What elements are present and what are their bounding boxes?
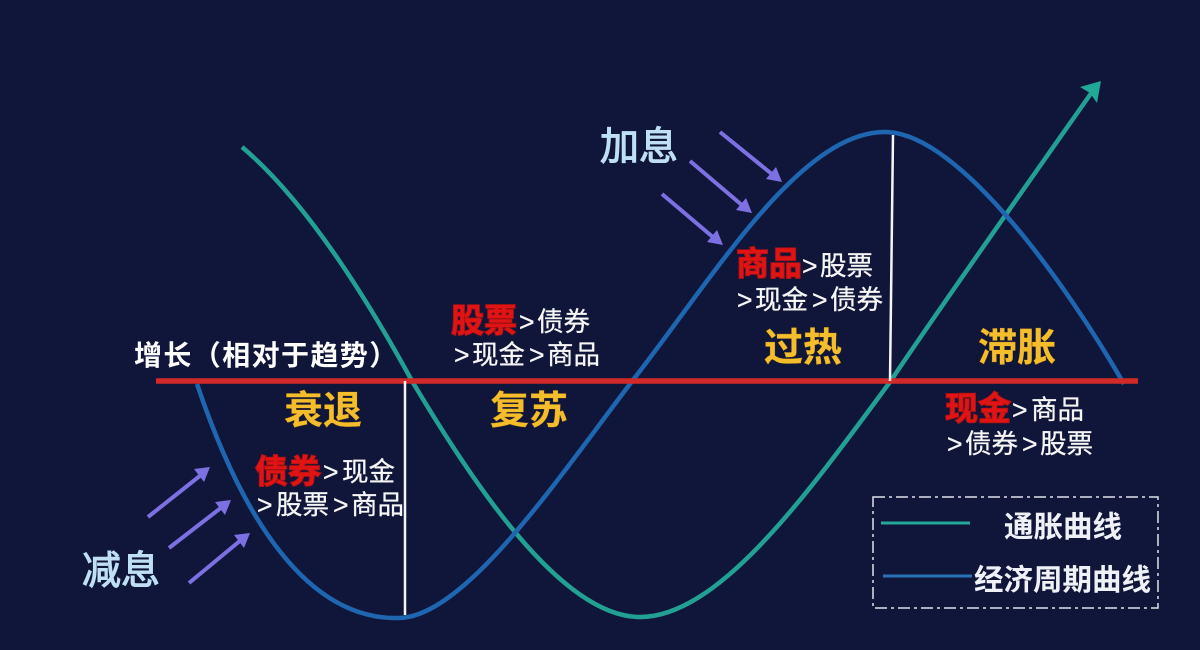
asset ranking: recovery: 股票 <box>451 302 517 339</box>
inflation curve <box>242 92 1092 617</box>
phase: recession: 衰退 <box>284 390 362 433</box>
asset ranking: recession <box>255 453 404 520</box>
asset ranking: recovery: 现金 <box>472 340 525 370</box>
legend: inflation curve: 通胀曲线 <box>1004 511 1122 544</box>
asset ranking: overheat <box>736 245 883 315</box>
asset ranking: recovery: 商品 <box>547 340 600 370</box>
asset ranking: recovery <box>451 302 600 370</box>
divider: overheat peak <box>890 135 893 381</box>
phase: overheat: 过热 <box>764 327 842 370</box>
arrows: rate hike <box>662 132 782 245</box>
asset ranking: recession: > <box>333 490 348 520</box>
asset ranking: recovery: > <box>519 307 534 337</box>
inflation arrow head <box>1080 81 1101 103</box>
asset ranking: stagflation: 债券 <box>965 429 1018 459</box>
asset ranking: recession: > <box>323 457 338 487</box>
arrows: rate cut <box>148 467 250 583</box>
phase: stagflation: 滞胀 <box>978 327 1056 370</box>
legend <box>873 497 1158 608</box>
asset ranking: recession: 现金 <box>342 457 395 487</box>
asset ranking: overheat: > <box>737 285 752 315</box>
asset ranking: stagflation: 商品 <box>1031 395 1084 425</box>
asset ranking: recession: 商品 <box>351 490 404 520</box>
asset ranking: stagflation: 股票 <box>1040 429 1093 459</box>
asset ranking: overheat: 现金 <box>755 285 808 315</box>
asset ranking: stagflation: > <box>1022 429 1037 459</box>
asset ranking: overheat: 债券 <box>830 285 883 315</box>
legend: economic cycle curve: 经济周期曲线 <box>974 564 1151 597</box>
asset ranking: stagflation <box>945 390 1093 459</box>
divider: recession trough <box>404 381 406 615</box>
asset ranking: recovery: 债券 <box>537 307 590 337</box>
asset ranking: recession: > <box>257 490 272 520</box>
asset ranking: stagflation: > <box>1012 395 1027 425</box>
phase: recovery: 复苏 <box>490 390 568 433</box>
asset ranking: overheat: 商品 <box>736 245 802 282</box>
asset ranking: overheat: > <box>802 251 817 281</box>
growth baseline <box>156 378 1138 384</box>
label: rate cut: 减息 <box>82 550 160 593</box>
asset ranking: recession: 债券 <box>255 453 321 490</box>
economic cycle curve <box>197 132 1124 618</box>
baseline label: 增长（相对于趋势） <box>134 340 399 371</box>
asset ranking: stagflation: 现金 <box>945 390 1011 427</box>
asset ranking: recovery: > <box>529 340 544 370</box>
asset ranking: overheat: > <box>812 285 827 315</box>
asset ranking: stagflation: > <box>947 429 962 459</box>
asset ranking: overheat: 股票 <box>820 251 873 281</box>
asset ranking: recovery: > <box>454 340 469 370</box>
label: rate hike: 加息 <box>600 126 678 169</box>
asset ranking: recession: 股票 <box>276 490 329 520</box>
